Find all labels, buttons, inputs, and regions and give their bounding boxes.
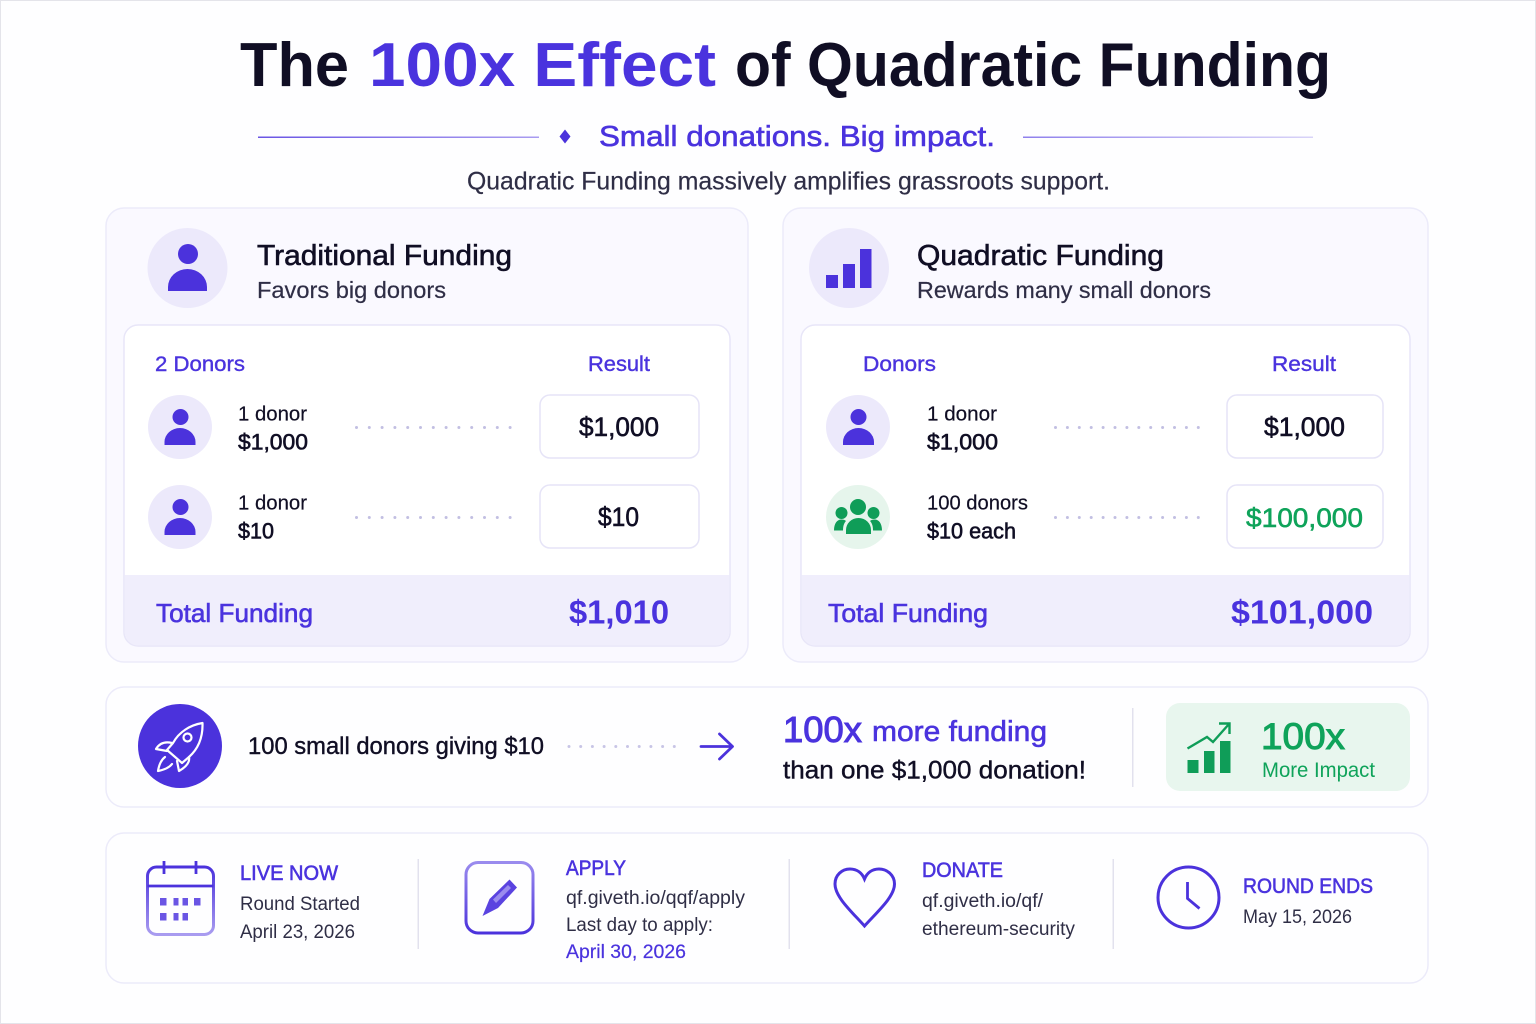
text: donate: ethereum-security	[922, 919, 1075, 940]
title: The	[240, 31, 349, 100]
icon: heart	[835, 869, 894, 926]
text: donate: DONATE	[922, 859, 1003, 882]
subheading: favors big donors: Favors big donors	[257, 277, 446, 303]
text: live now	[240, 862, 360, 943]
row: 100 donors $10 each	[826, 485, 1383, 549]
panel: traditional funding	[106, 208, 748, 662]
icon: person in circle	[148, 228, 228, 308]
text: donate: qf.giveth.io/qf/	[922, 891, 1044, 912]
icon: growth chart	[1188, 724, 1230, 773]
row: 1 donor $10: 1 donor	[238, 492, 307, 514]
row: 1 donor $1,000	[826, 395, 1383, 459]
subheading: rewards many small donors: Rewards many small donors	[917, 277, 1211, 303]
row: 1 donor $10: $10	[598, 502, 639, 532]
column header: result: Result	[588, 352, 650, 376]
text: 100x more funding	[783, 709, 1086, 784]
text: live now: April 23, 2026	[240, 922, 355, 943]
row: 1 donor $1,000: $1,000	[1264, 412, 1345, 442]
text: apply: April 30, 2026	[566, 942, 686, 963]
row: 1 donor $1,000: 1 donor	[927, 404, 997, 426]
icon: pencil	[466, 862, 533, 933]
row: 1 donor $1,000: $1,000	[579, 412, 659, 442]
column header: 2 donors: 2 Donors	[155, 352, 245, 376]
text: apply: qf.giveth.io/qqf/apply	[566, 888, 746, 909]
title: 100x Effect	[369, 31, 716, 100]
text: 100x more funding: than one $1,000 donation!	[783, 756, 1086, 784]
column header: result: Result	[1272, 352, 1336, 376]
row: 1 donor $1,000: $1,000	[238, 430, 308, 454]
title: of Quadratic Funding	[735, 31, 1331, 100]
text: round ends: May 15, 2026	[1243, 907, 1352, 928]
subtitle with rules	[258, 121, 1313, 153]
total value: $101,000	[1231, 594, 1373, 630]
row: 1 donor $1,000: 1 donor	[238, 404, 307, 426]
text: 100x more funding: 100x	[783, 709, 862, 750]
icon: clock	[1158, 867, 1219, 928]
total label: Total Funding	[828, 598, 988, 628]
text: 100x more funding: more funding	[872, 716, 1047, 748]
panel: quadratic funding	[783, 208, 1428, 662]
text: round ends: ROUND ENDS	[1243, 875, 1373, 898]
icon: rocket	[138, 704, 222, 788]
icon: calendar	[148, 861, 214, 934]
inner card	[124, 325, 730, 646]
row: 1 donor $1,000	[148, 395, 699, 459]
tagline: Quadratic Funding massively amplifies grassroots support.	[467, 168, 1110, 196]
row: 1 donor $10: $10	[238, 518, 274, 544]
text: live now: LIVE NOW	[240, 862, 338, 885]
row: 1 donor $10	[148, 485, 699, 549]
heading: traditional funding: Traditional Funding	[257, 240, 512, 272]
panel: impact banner	[106, 687, 1428, 807]
subtitle with rules: Small donations. Big impact.	[599, 121, 995, 153]
title	[240, 31, 1331, 100]
row: 100 donors $10 each: 100 donors	[927, 492, 1028, 514]
inner card	[801, 325, 1410, 646]
text: apply: APPLY	[566, 857, 626, 880]
heading: quadratic funding: Quadratic Funding	[917, 240, 1164, 272]
text: apply: Last day to apply:	[566, 915, 713, 936]
total label: Total Funding	[156, 598, 313, 628]
callout: 100x more impact	[1166, 703, 1410, 791]
total value: $1,010	[569, 594, 669, 630]
column header: donors: Donors	[863, 352, 936, 376]
callout: 100x more impact: More Impact	[1262, 759, 1375, 782]
text: donate	[922, 859, 1075, 940]
text: 100 small donors: 100 small donors giving $10	[248, 733, 544, 760]
icon: bar chart in circle	[809, 228, 889, 308]
text: live now: Round Started	[240, 894, 360, 915]
panel: key dates and links	[106, 833, 1428, 983]
text: apply	[566, 857, 746, 963]
row: 100 donors $10 each: $100,000	[1246, 503, 1363, 533]
arrow: dotted arrow	[569, 734, 732, 759]
row: 1 donor $1,000: $1,000	[927, 430, 998, 454]
text: round ends	[1243, 875, 1373, 928]
row: 100 donors $10 each: $10 each	[927, 518, 1016, 544]
callout: 100x more impact: 100x	[1261, 716, 1346, 757]
